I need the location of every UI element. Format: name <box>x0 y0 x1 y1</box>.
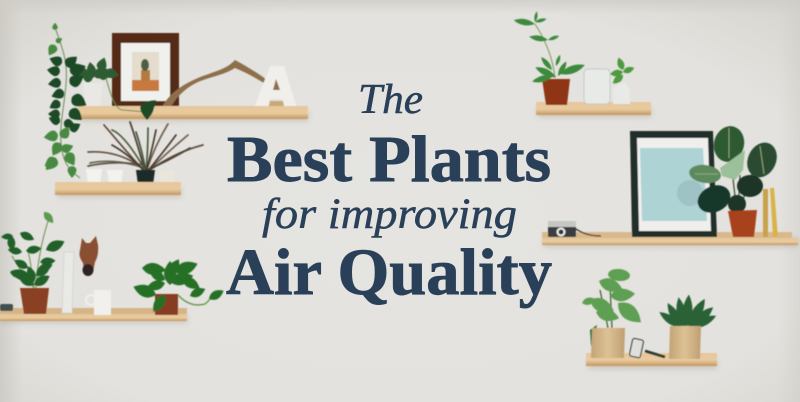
burlap pot <box>591 328 625 358</box>
title line: The: The <box>358 77 423 123</box>
small dark object <box>0 304 13 311</box>
tall seedling <box>513 11 586 85</box>
spiky plant <box>88 122 203 172</box>
terracotta pot <box>542 79 570 105</box>
terracotta pot <box>20 288 49 314</box>
white mug <box>86 290 111 315</box>
camera <box>548 221 601 237</box>
shelf <box>78 106 308 121</box>
small plant above pot <box>75 56 120 84</box>
letter A ornament <box>254 66 297 108</box>
shelf group: lower left <box>0 210 226 323</box>
calathea plant <box>688 123 782 218</box>
shelf <box>586 353 717 369</box>
shelf <box>536 102 651 117</box>
spiky green plant <box>657 294 718 332</box>
patterned leaf plant <box>581 268 646 346</box>
shelf group: bottom right <box>581 268 718 369</box>
leafy plant <box>1 210 67 289</box>
shelf group: right middle <box>542 123 798 247</box>
title <box>226 77 552 309</box>
horse mask <box>79 236 98 276</box>
sprout in vase <box>609 56 635 104</box>
glass jar <box>584 69 610 104</box>
pothos plant <box>131 257 226 315</box>
shelf group: upper left <box>41 23 308 178</box>
title line: Air Quality: Air Quality <box>226 236 552 309</box>
burlap pot <box>669 326 701 359</box>
glass vase <box>62 252 74 313</box>
hanging ivy <box>41 23 159 178</box>
black framed teal print <box>630 131 717 237</box>
terracotta pot <box>728 210 757 237</box>
shelf group: upper right <box>513 11 651 117</box>
shelf <box>542 232 798 247</box>
pothos pot <box>155 294 178 315</box>
driftwood <box>162 60 267 107</box>
shelf group: spiky plant and cups <box>55 122 203 197</box>
title line: for improving: for improving <box>262 191 517 238</box>
shelf <box>55 182 181 197</box>
black pot <box>136 170 155 185</box>
framed picture <box>112 33 179 108</box>
magnifier <box>629 338 665 358</box>
shelf <box>0 308 187 323</box>
folding ruler <box>763 188 778 237</box>
white cups <box>86 169 175 185</box>
title line: Best Plants: Best Plants <box>227 123 551 196</box>
white pot <box>83 83 103 106</box>
